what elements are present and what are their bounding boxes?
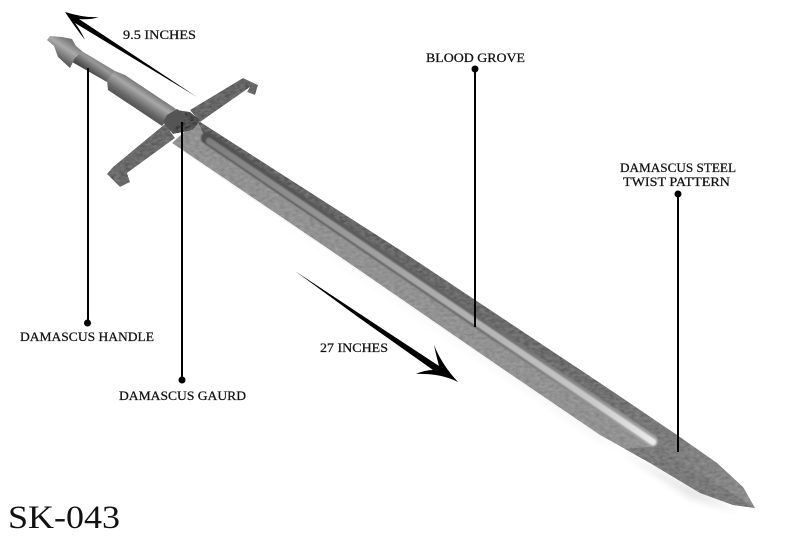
pommel	[47, 36, 82, 68]
blade edge highlight	[174, 145, 600, 436]
callout: damascus handle: DAMASCUS HANDLE	[20, 330, 154, 344]
callout: damascus steel twist pattern: DAMASCUS STEEL	[620, 161, 736, 175]
sword	[47, 36, 755, 512]
collar	[163, 109, 186, 131]
label: 9.5 inches: 9.5 INCHES	[123, 28, 196, 42]
arrow: 9.5 inches	[65, 12, 197, 97]
arrow: 27 inches	[295, 271, 458, 382]
cross guard	[107, 78, 258, 187]
title: model number: SK-043	[8, 500, 120, 536]
callout: damascus handle	[20, 68, 154, 344]
label: 27 inches: 27 INCHES	[320, 341, 388, 355]
blade	[172, 120, 755, 508]
grip	[72, 50, 176, 126]
callout: blood grove: BLOOD GROVE	[426, 51, 525, 65]
callout: damascus gaurd: DAMASCUS GAURD	[119, 389, 246, 403]
callout: damascus gaurd	[119, 122, 246, 403]
callout: blood grove	[426, 51, 525, 327]
callout: damascus steel twist pattern	[620, 161, 736, 452]
blood groove	[207, 138, 653, 442]
callout: damascus steel twist pattern: TWIST PATTERN	[623, 175, 730, 189]
